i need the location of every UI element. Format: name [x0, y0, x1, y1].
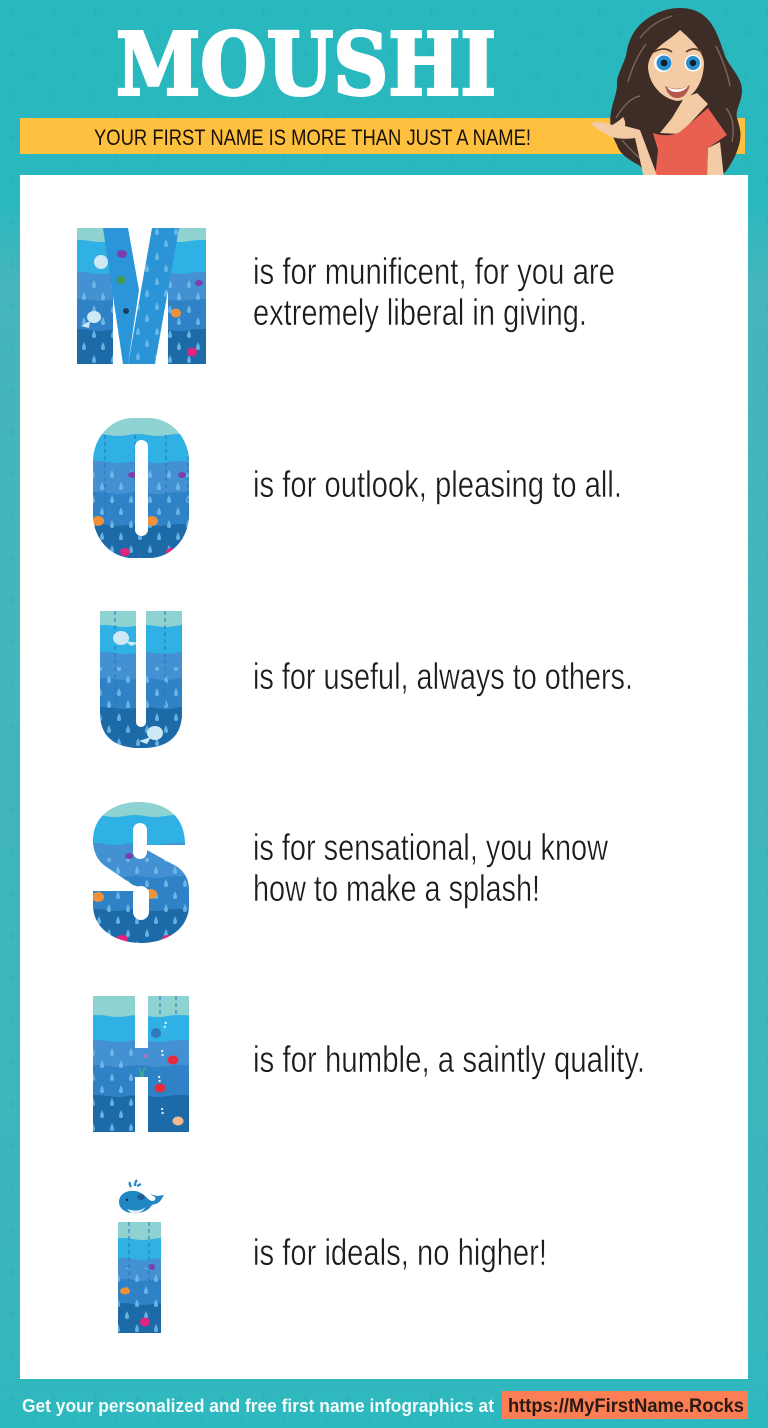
text: H line: is for humble, a saintly quality.	[253, 1039, 645, 1080]
text: M line: extremely liberal in giving.	[253, 292, 587, 333]
text: S line	[253, 827, 608, 909]
letter O	[93, 418, 189, 558]
letter I	[118, 1222, 161, 1333]
banner	[20, 118, 745, 154]
footer url badge: https://MyFirstName.Rocks	[508, 1396, 744, 1417]
banner tagline: YOUR FIRST NAME IS MORE THAN JUST A NAME!	[94, 125, 531, 150]
text: M line	[253, 251, 615, 333]
footer call to action: Get your personalized and free first name infographics at	[22, 1396, 494, 1416]
letter U	[100, 611, 182, 748]
text: O line: is for outlook, pleasing to all.	[253, 464, 622, 505]
fish and whales on M	[81, 250, 203, 356]
white panel	[20, 175, 748, 1379]
text: S line: is for sensational, you know	[253, 827, 608, 868]
text: I line: is for ideals, no higher!	[253, 1232, 547, 1273]
letter H	[88, 996, 194, 1132]
text: U line: is for useful, always to others.	[253, 656, 633, 697]
text: M line: is for munificent, for you are	[253, 251, 615, 292]
letter M	[77, 228, 206, 364]
text: S line: how to make a splash!	[253, 868, 540, 909]
title: MOUSHI	[116, 14, 496, 116]
icon: cartoon woman presenter	[590, 8, 742, 178]
letter S	[93, 802, 189, 943]
icon: whale dot of letter i	[119, 1180, 164, 1213]
